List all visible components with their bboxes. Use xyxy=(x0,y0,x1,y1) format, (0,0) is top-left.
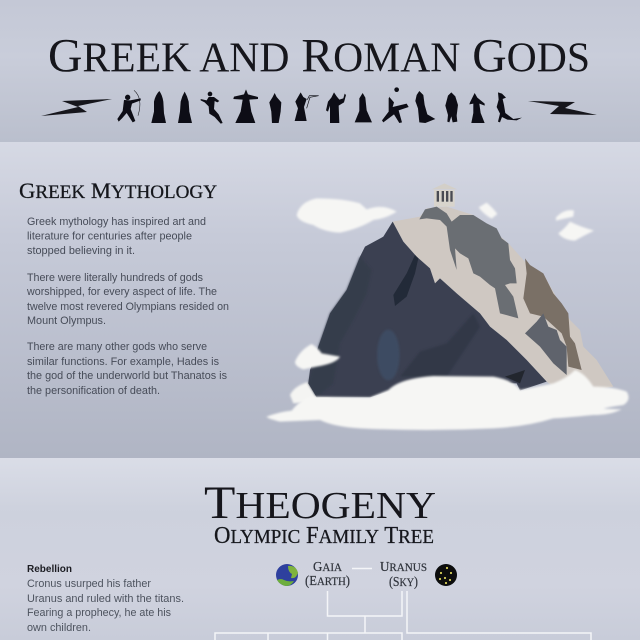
icon: Earth xyxy=(276,564,298,586)
text block: intro: Greek mythology has inspired art and xyxy=(27,216,206,228)
cloud: upper left xyxy=(297,198,397,233)
mountain: dark shadow xyxy=(308,257,372,397)
mountain: lower shadow xyxy=(400,313,480,377)
text block: Rebellion: Cronus usurped his father xyxy=(27,578,151,590)
panel: Theogeny xyxy=(0,458,640,640)
label: Uranus (Sky) xyxy=(380,559,427,589)
figure: arms spread god xyxy=(233,89,258,123)
mountain: brown rock xyxy=(523,258,582,370)
label: Uranus (Sky): URANUS xyxy=(380,559,427,574)
text block: Rebellion: Uranus and ruled with the titans. xyxy=(27,593,184,605)
figure: hooded goddess xyxy=(151,91,166,123)
mountain: grey rock upper xyxy=(419,207,518,318)
text block: intro xyxy=(26,216,229,397)
label: Gaia (Earth): GAIA xyxy=(313,559,343,574)
subheading: Olympic Family Tree: OLYMPIC FAMILY TREE xyxy=(214,523,434,549)
panel: Greek mythology xyxy=(0,142,640,458)
text block: intro: the god of the underworld but Thanatos is xyxy=(27,370,227,382)
text block: intro: literature for centuries after people xyxy=(27,230,192,242)
icon: night sky xyxy=(435,564,457,586)
mountain: light rock xyxy=(393,207,613,390)
cloud: left small xyxy=(295,344,340,369)
heading: Theogeny: THEOGENY xyxy=(204,477,436,529)
mountain: crevice xyxy=(393,255,418,306)
figure: warrior with helmet xyxy=(269,93,281,123)
figure: veiled goddess xyxy=(355,93,372,122)
text block: intro: Mount Olympus. xyxy=(27,315,106,327)
text block: intro: stopped believing in it. xyxy=(27,245,135,257)
figure: cloaked figure xyxy=(445,92,458,122)
text block: intro: worshipped, for every aspect of life. The xyxy=(26,286,217,298)
figure: reaper xyxy=(295,92,319,121)
panel: header xyxy=(0,0,640,142)
figure: archer xyxy=(117,90,141,122)
family tree connectors xyxy=(215,568,591,640)
lightning bolt right xyxy=(528,101,597,115)
text block: Rebellion: Fearing a prophecy, he ate his xyxy=(27,607,171,619)
illustration: Mount Olympus xyxy=(267,183,629,430)
text block: intro: similar functions. For example, Hades is xyxy=(27,356,219,368)
lightning bolt left xyxy=(41,99,112,116)
gods silhouettes right half xyxy=(326,87,522,123)
figure: goddess with wide sleeves xyxy=(469,93,485,123)
mountain: grey rock lower xyxy=(525,313,567,375)
label: Gaia (Earth) xyxy=(305,559,350,588)
text block: Rebellion: own children. xyxy=(27,622,91,634)
clouds: small right xyxy=(479,203,594,241)
text block: Rebellion xyxy=(27,563,184,634)
heading: Greek Mythology: GREEK MYTHOLOGY xyxy=(19,178,217,203)
label: Uranus (Sky): (SKY) xyxy=(389,574,418,589)
text block: Rebellion: Rebellion xyxy=(27,563,72,575)
temple xyxy=(432,183,457,207)
figure: god raising arm xyxy=(326,92,346,123)
text block: intro: There were literally hundreds of gods xyxy=(27,272,203,284)
title: GREEK AND ROMAN GODS xyxy=(48,30,590,82)
mountain: dark face xyxy=(308,222,547,397)
figure: dancing warrior xyxy=(382,87,409,123)
text block: intro: twelve most revered Olympians resided on xyxy=(27,301,229,313)
figure: running god xyxy=(201,92,223,124)
mountain: blue patch xyxy=(377,330,400,380)
label: Gaia (Earth): (EARTH) xyxy=(305,573,350,588)
figure: serpent-tailed figure xyxy=(497,92,522,122)
gods silhouettes left half xyxy=(117,89,319,124)
text block: intro: There are many other gods who serve xyxy=(27,341,207,353)
figure: robed goddess xyxy=(178,92,192,123)
cloud: base xyxy=(267,370,629,430)
figure: goddess in long gown xyxy=(415,91,435,123)
text block: intro: the personification of death. xyxy=(27,385,160,397)
cloud: behind mountain xyxy=(290,382,333,403)
